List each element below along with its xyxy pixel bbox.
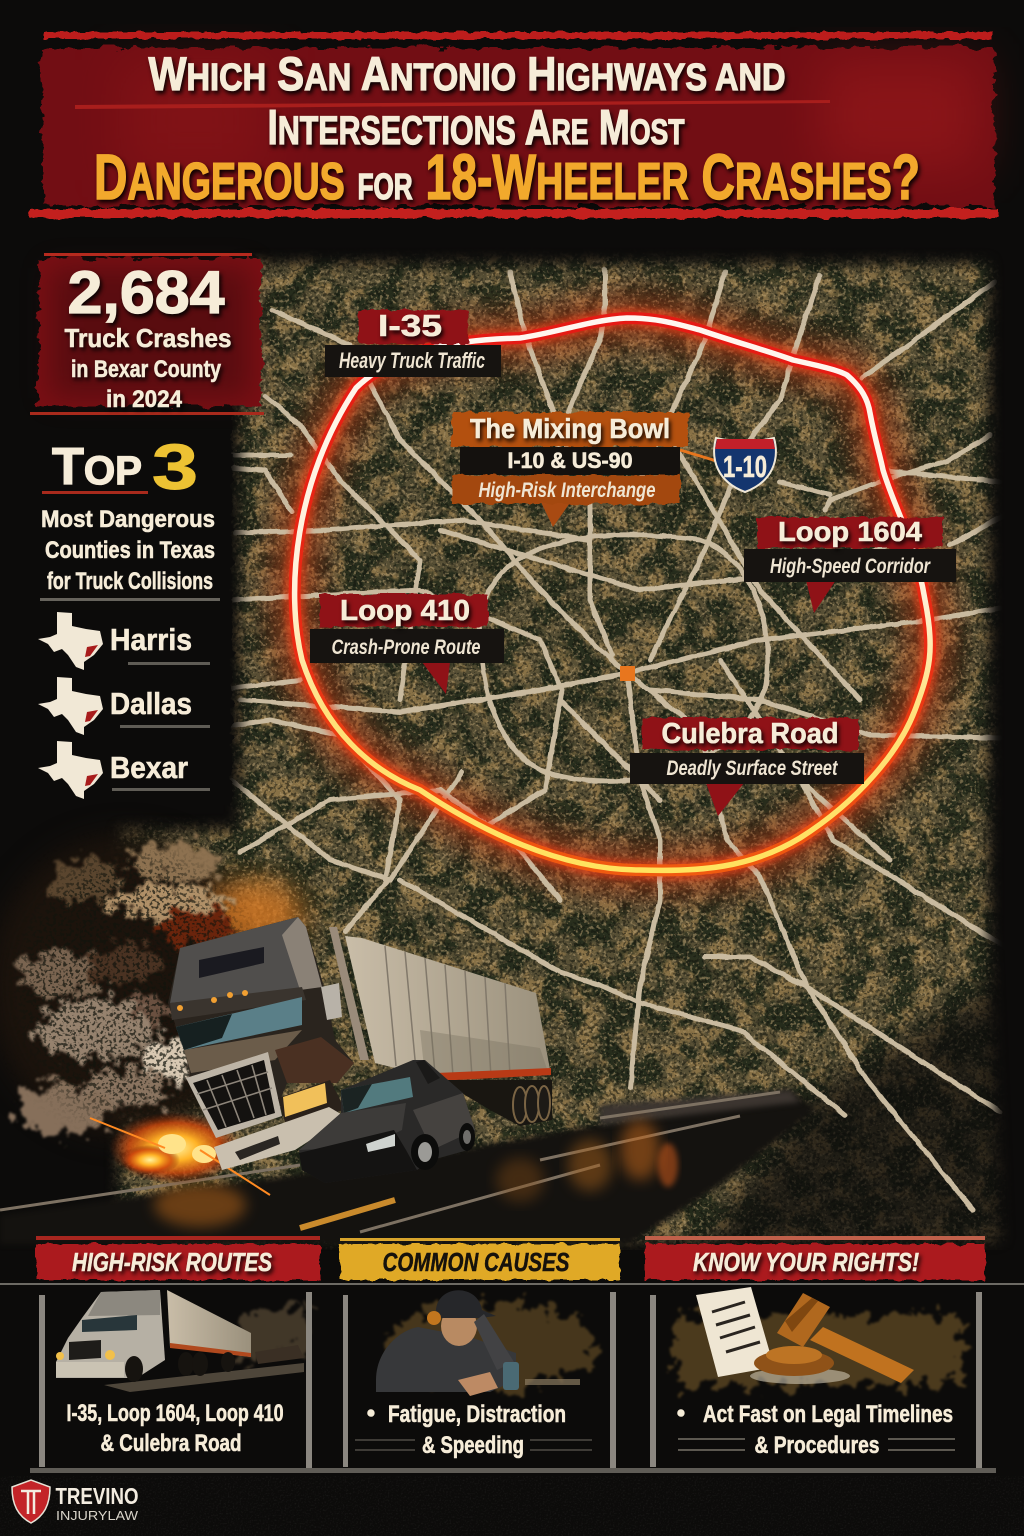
semi trailer (345, 936, 552, 1126)
tan backdrop (385, 1303, 595, 1387)
map label: I-35: I-35 (378, 308, 442, 343)
crushed car (299, 1060, 475, 1183)
map label: The Mixing Bowl: The Mixing Bowl (470, 413, 670, 444)
county: Dallas (38, 677, 210, 735)
logo shield (12, 1480, 50, 1523)
causes text: Fatigue, Distraction (388, 1401, 566, 1428)
top 3 counties list (38, 431, 220, 799)
stat box: truck crashes (30, 253, 264, 415)
section: high-risk routes (36, 1236, 320, 1457)
icon: I-10 interstate shield: 1-10 (723, 449, 767, 484)
icon: gavel and document (696, 1287, 914, 1384)
map label: Loop 1604: Loop 1604 (778, 516, 922, 547)
icon: I-10 interstate shield (714, 438, 776, 492)
county: Bexar: Bexar (110, 750, 188, 785)
map label: Loop 410: Loop 410 (340, 595, 470, 627)
map label: The Mixing Bowl: High-Risk Interchange (478, 479, 656, 502)
highlighted ring road (295, 318, 930, 870)
stat caption: Truck Crashes (64, 323, 232, 353)
icon: tired driver (376, 1290, 580, 1396)
section: know your rights (645, 1236, 985, 1459)
crash scene illustration (0, 820, 815, 1244)
heading line 2: INTERSECTIONS ARE MOST (268, 101, 684, 155)
causes text (367, 1400, 566, 1459)
stat box: truck crashes: in Bexar County (71, 356, 222, 383)
sparks and fire (90, 1112, 270, 1195)
map label: The Mixing Bowl (452, 412, 720, 527)
map label: I-35: Heavy Truck Traffic (339, 348, 485, 373)
logo: Trevino Injury Law: INJURYLAW (56, 1508, 139, 1523)
section: common causes (340, 1238, 620, 1459)
tan backdrop (675, 1315, 960, 1385)
map label: Loop 410: Crash-Prone Route (332, 636, 481, 659)
big number: 2,684 (68, 259, 225, 326)
causes text: • (367, 1400, 375, 1427)
top 3 heading (42, 431, 198, 503)
county: Harris (38, 612, 210, 670)
route list text: I-35, Loop 1604, Loop 410 (66, 1400, 284, 1427)
rights text: & Procedures (754, 1432, 880, 1459)
county: Bexar (38, 741, 210, 799)
rights text: • (677, 1400, 685, 1427)
map label: I-35 (325, 308, 501, 377)
rights text: Act Fast on Legal Timelines (703, 1401, 953, 1428)
top 3 description (41, 506, 215, 595)
county: Dallas: Dallas (110, 686, 192, 721)
road surface (0, 1090, 815, 1244)
logo: Trevino Injury Law (12, 1480, 139, 1523)
map of San Antonio (100, 240, 1024, 1250)
top 3 heading: 3 (152, 431, 198, 503)
header: high-risk routes (36, 1236, 320, 1280)
stat box: truck crashes: in 2024 (106, 386, 183, 413)
heading line 3: DANGEROUS FOR 18-WHEELER CRASHES? (94, 141, 920, 213)
header: high-risk routes: HIGH-RISK ROUTES (72, 1247, 273, 1277)
map label: Culebra Road (630, 718, 864, 816)
lower right map fade (700, 960, 1024, 1250)
header: common causes (340, 1238, 620, 1280)
causes text: & Speeding (422, 1432, 524, 1459)
county: Harris: Harris (110, 622, 192, 657)
rights text (677, 1400, 953, 1459)
map label: Culebra Road: Culebra Road (662, 718, 838, 750)
map label: Loop 410 (310, 594, 504, 694)
icon: semi truck (56, 1290, 305, 1392)
header: common causes: COMMON CAUSES (382, 1247, 570, 1277)
bottom grain (0, 1476, 1024, 1536)
map label: Culebra Road: Deadly Surface Street (666, 757, 838, 780)
map label: Loop 1604: High-Speed Corridor (770, 555, 931, 578)
smoke speckle (13, 842, 252, 1126)
orange glow around ring (295, 318, 930, 870)
top 3 description: Counties in Texas (45, 537, 215, 564)
map label: Loop 1604 (744, 516, 956, 613)
top 3 heading: TOP (52, 438, 142, 496)
truck cab (168, 917, 369, 1170)
map label: The Mixing Bowl: I-10 & US-90 (508, 448, 632, 473)
header: know your rights (645, 1236, 985, 1280)
header: know your rights: KNOW YOUR RIGHTS! (693, 1247, 919, 1277)
logo: Trevino Injury Law: TREVINO (56, 1483, 138, 1509)
downtown marker (620, 666, 635, 681)
top 3 description: Most Dangerous (41, 506, 215, 533)
title banner (30, 32, 998, 218)
smoke clouds (0, 820, 305, 1160)
top 3 description: for Truck Collisions (47, 568, 213, 595)
left dark column (25, 405, 232, 805)
heading line 1: WHICH SAN ANTONIO HIGHWAYS AND (148, 47, 786, 100)
roads (205, 270, 1010, 1210)
route list text (66, 1400, 284, 1457)
route list text: & Culebra Road (100, 1430, 242, 1457)
panel dividers (0, 1283, 1024, 1473)
